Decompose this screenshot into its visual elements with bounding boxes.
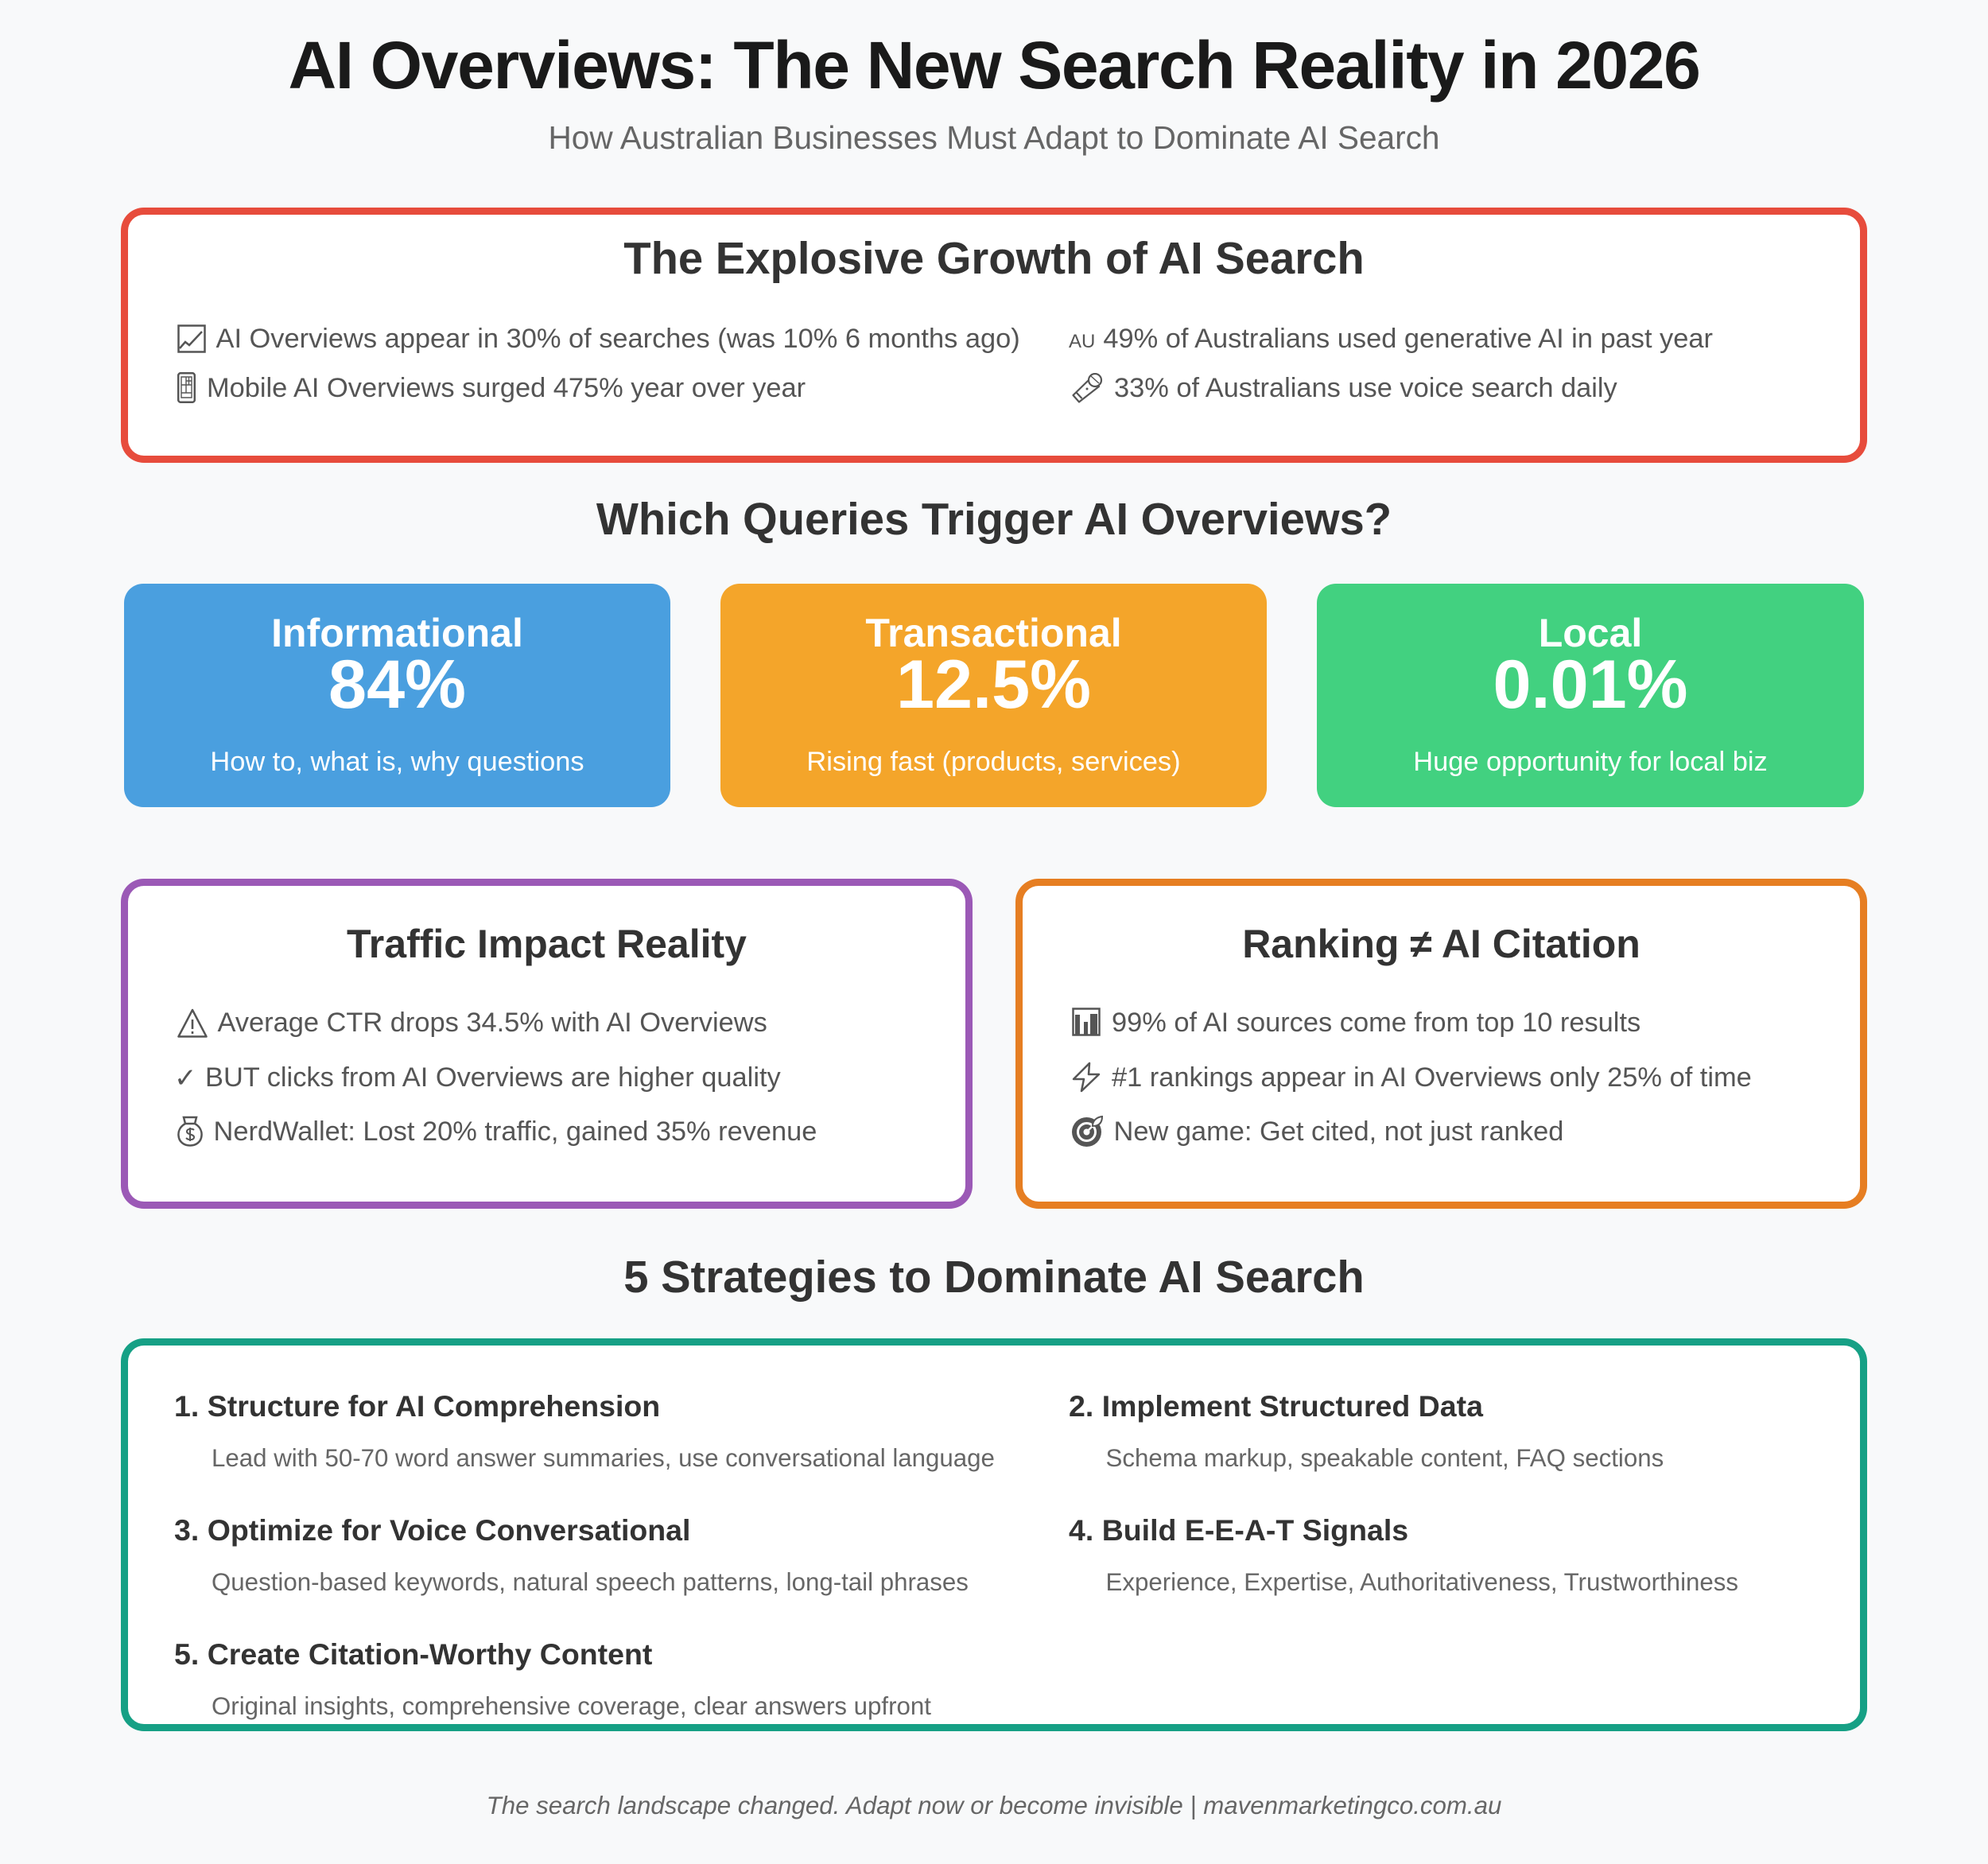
card value: 0.01% (1493, 646, 1687, 722)
panel: ranking vs citation (1015, 879, 1867, 1209)
panel: traffic impact (121, 879, 973, 1209)
heading: traffic impact: Traffic Impact Reality (347, 922, 747, 966)
strategy 2: 2. Implement Structured Data (1069, 1389, 1483, 1423)
strategy 5: 5. Create Citation-Worthy Content (174, 1637, 652, 1671)
stat: number one rankings: #1 rankings appear in AI Overviews only 25% of time (1112, 1062, 1752, 1093)
strategy 3: Question-based keywords, natural speech patterns, long-tail phrases (212, 1568, 969, 1596)
heading: query triggers: Which Queries Trigger AI Overviews? (596, 493, 1392, 544)
heading: explosive growth: The Explosive Growth of AI Search (623, 233, 1365, 283)
stat: Australians using generative AI: AU 49% of Australians used generative AI in past year (1069, 323, 1713, 353)
card description: Huge opportunity for local biz (1413, 746, 1768, 776)
panel: explosive growth of AI search (121, 208, 1867, 463)
strategy 4: Experience, Expertise, Authoritativeness, Trustworthiness (1105, 1568, 1738, 1596)
stat: AI Overviews share of searches: AI Overviews appear in 30% of searches (was 10% 6 months ago) (216, 323, 1020, 353)
stat: get cited: New game: Get cited, not just ranked (1113, 1116, 1563, 1147)
card: informational queries (124, 584, 670, 807)
stat: NerdWallet example: NerdWallet: Lost 20% traffic, gained 35% revenue (213, 1116, 817, 1147)
subtitle: How Australian Businesses Must Adapt to Dominate AI Search (549, 119, 1439, 156)
card: transactional queries (720, 584, 1267, 807)
strategy 2: Schema markup, speakable content, FAQ sections (1105, 1444, 1664, 1472)
heading: ranking vs citation: Ranking ≠ AI Citation (1242, 922, 1640, 966)
card title: Local (1539, 611, 1642, 655)
card description: How to, what is, why questions (210, 746, 584, 776)
strategy 1 (174, 1389, 995, 1472)
panel: five strategies (121, 1338, 1867, 1731)
strategy 1: Lead with 50-70 word answer summaries, use conversational language (212, 1444, 995, 1472)
strategy 4: 4. Build E-E-A-T Signals (1069, 1513, 1408, 1547)
strategy 3 (174, 1513, 969, 1596)
card value: 84% (328, 646, 466, 722)
heading: strategies: 5 Strategies to Dominate AI Search (623, 1252, 1365, 1301)
card: local queries (1317, 584, 1864, 807)
strategy 5: Original insights, comprehensive coverage, clear answers upfront (212, 1692, 931, 1720)
stat: Australians using voice search: 33% of Australians use voice search daily (1114, 373, 1617, 403)
stat: CTR drop: Average CTR drops 34.5% with AI Overviews (218, 1007, 767, 1037)
strategy 3: 3. Optimize for Voice Conversational (174, 1513, 690, 1547)
strategy 1: 1. Structure for AI Comprehension (174, 1389, 660, 1423)
stat: higher quality clicks: BUT clicks from AI Overviews are higher quality (205, 1062, 781, 1093)
stat: higher quality clicks: ✓ (174, 1062, 197, 1094)
card title: Informational (271, 611, 523, 655)
card description: Rising fast (products, services) (806, 746, 1181, 776)
stat: top 10 sources: 99% of AI sources come from top 10 results (1112, 1007, 1640, 1037)
title: AI Overviews: The New Search Reality in 2026 (288, 28, 1700, 103)
strategy 4 (1069, 1513, 1738, 1596)
stat: mobile AI Overviews surge: Mobile AI Overviews surged 475% year over year (207, 373, 806, 403)
card title: Transactional (865, 611, 1122, 655)
card value: 12.5% (896, 646, 1091, 722)
strategy 5 (174, 1637, 931, 1720)
footer: The search landscape changed. Adapt now or become invisible | mavenmarketingco.com.au (487, 1792, 1501, 1819)
strategy 2 (1069, 1389, 1664, 1472)
